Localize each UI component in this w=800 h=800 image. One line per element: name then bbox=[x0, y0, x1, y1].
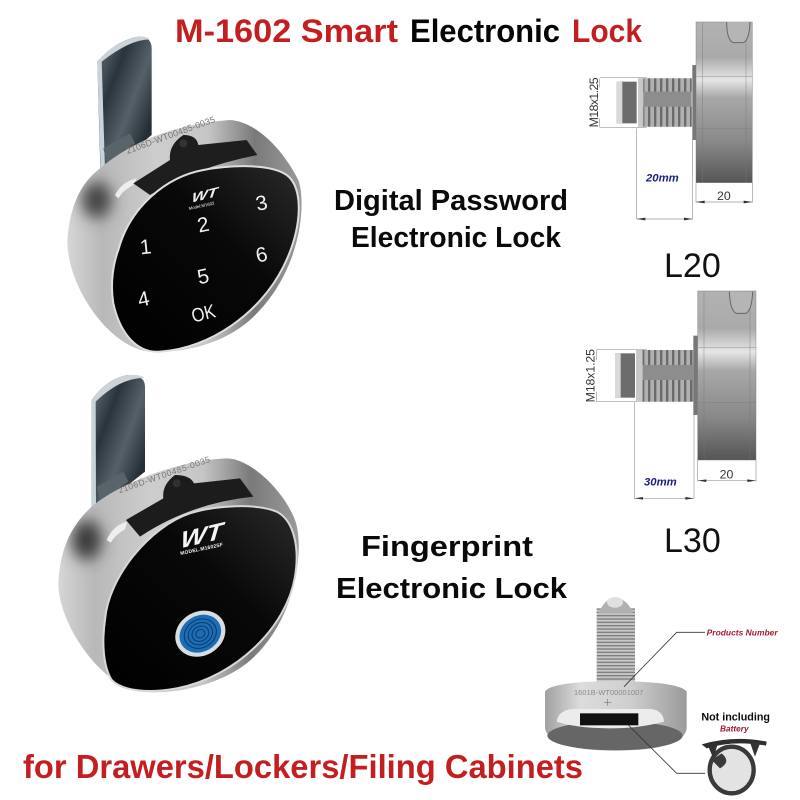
keypad: 6 bbox=[254, 243, 270, 268]
dimension drawing: L20: 20mm bbox=[645, 172, 679, 184]
title bbox=[175, 13, 642, 49]
label: L20: L20 bbox=[664, 247, 721, 285]
callout: battery: Battery bbox=[720, 724, 749, 734]
heading: digital password bbox=[334, 185, 568, 254]
dimension drawing: L30: M18x1.25 bbox=[584, 349, 598, 402]
keypad: Model:M1602 bbox=[188, 201, 215, 211]
heading: fingerprint: Electronic Lock bbox=[336, 573, 568, 605]
title: Lock bbox=[572, 13, 642, 49]
dimension drawing: L30: 20 bbox=[720, 467, 734, 481]
heading: digital password: Digital Password bbox=[334, 185, 568, 217]
title: Electronic bbox=[410, 13, 560, 49]
logo: MODEL.M1602SF bbox=[180, 542, 223, 557]
dimension drawing: L20 bbox=[587, 22, 752, 220]
product photo: digital password lock bbox=[67, 37, 302, 352]
dimension drawing: L30 bbox=[584, 291, 756, 500]
keypad: 2 bbox=[195, 213, 211, 238]
keypad: 3 bbox=[254, 191, 270, 216]
logo: WT bbox=[180, 517, 226, 553]
logo bbox=[180, 517, 226, 557]
keypad: OK bbox=[189, 301, 218, 328]
footer tagline: for Drawers/Lockers/Filing Cabinets bbox=[23, 748, 583, 785]
callout: battery bbox=[628, 711, 770, 773]
keypad: 4 bbox=[136, 287, 152, 312]
product photo: fingerprint lock bbox=[58, 375, 299, 692]
product photo: lock back with callouts bbox=[545, 597, 778, 793]
heading: fingerprint: Fingerprint bbox=[361, 531, 533, 563]
label: L30: L30 bbox=[664, 522, 721, 560]
engraved serial: 2106D-WT00485-0035 bbox=[117, 454, 212, 495]
dimension drawing: L30: 30mm bbox=[644, 477, 677, 489]
heading: digital password: Electronic Lock bbox=[351, 222, 562, 254]
dimension drawing: L20: 20 bbox=[717, 189, 731, 203]
keypad: 5 bbox=[195, 264, 211, 289]
keypad: 1 bbox=[139, 235, 153, 259]
callout: battery: Not including bbox=[701, 711, 770, 723]
icon: fingerprint sensor bbox=[167, 602, 234, 666]
product photo: lock back with callouts: 1601B-WT00001007 bbox=[574, 688, 643, 697]
dimension drawing: L20: M18x1.25 bbox=[587, 77, 601, 127]
callout: products number: Products Number bbox=[707, 627, 778, 637]
keypad bbox=[136, 184, 270, 328]
keypad: WT bbox=[191, 184, 220, 206]
icon: battery holder bbox=[702, 739, 767, 793]
heading: fingerprint bbox=[336, 531, 568, 605]
engraved serial: 2106D-WT00485-0035 bbox=[125, 114, 216, 156]
title: M-1602 Smart bbox=[175, 13, 398, 49]
callout: products number bbox=[624, 627, 778, 687]
